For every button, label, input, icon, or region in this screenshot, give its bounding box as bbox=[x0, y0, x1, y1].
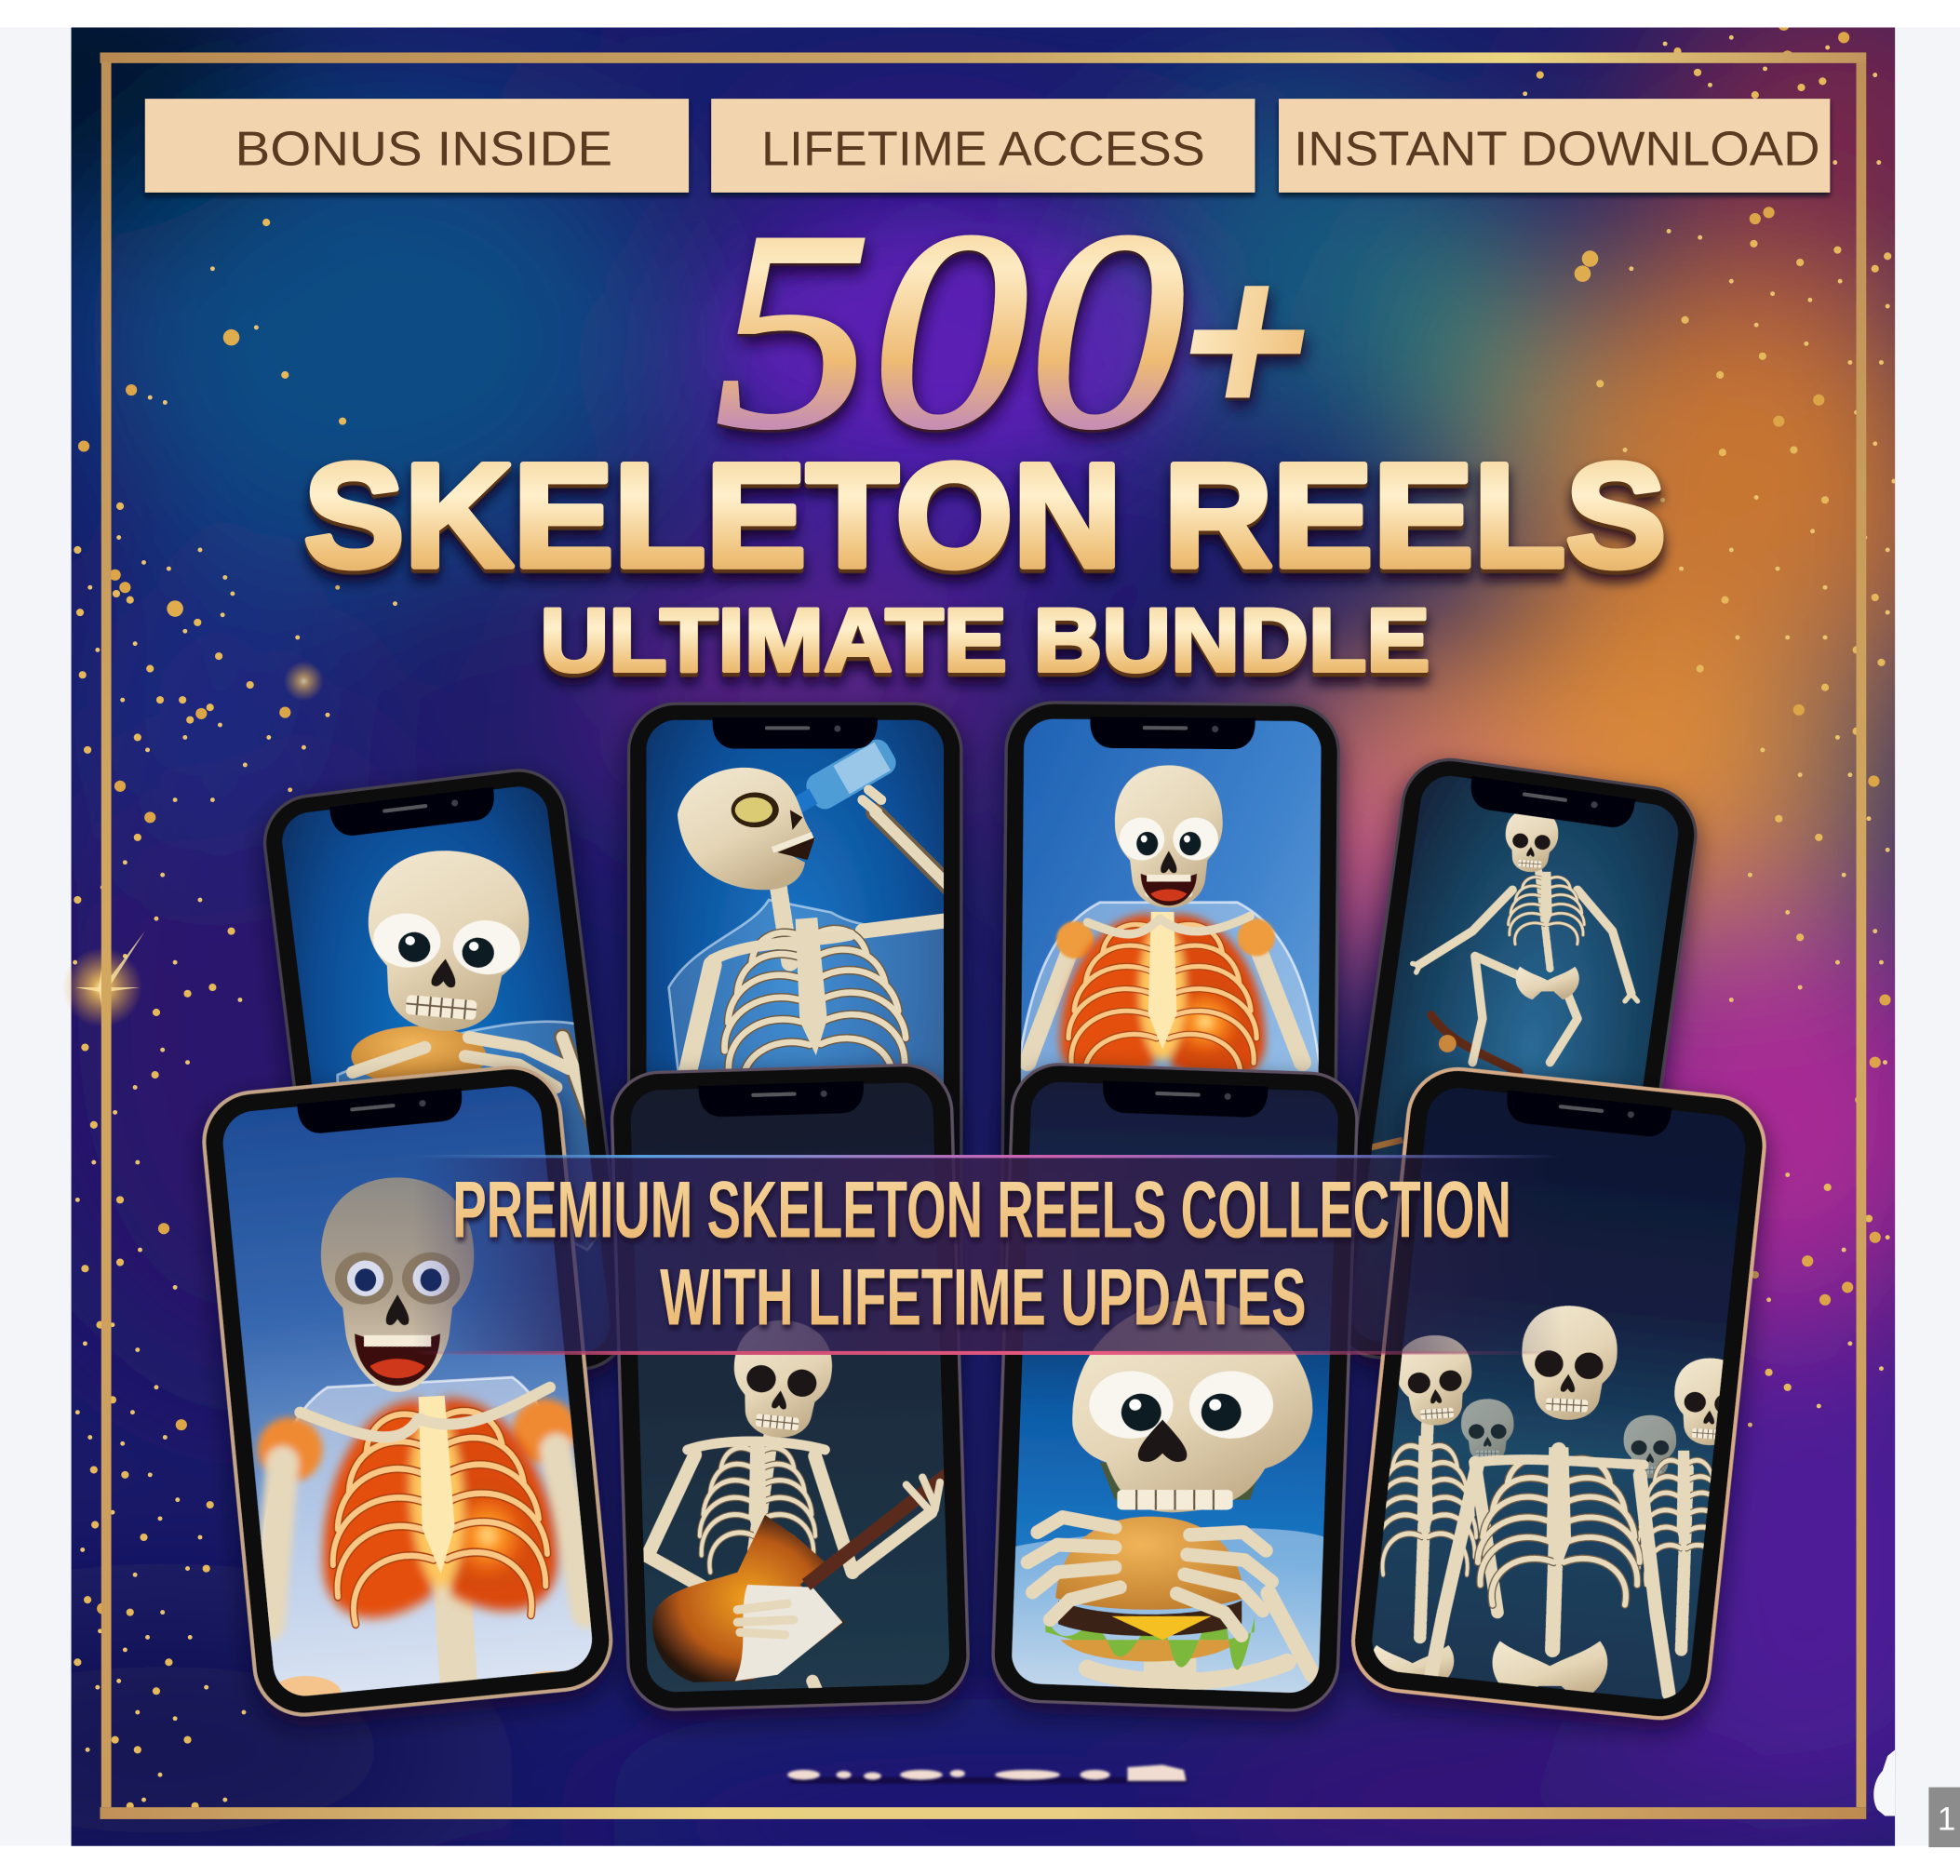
headline glow bbox=[725, 231, 1200, 444]
headline: ultimate bundle: ULTIMATE BUNDLE bbox=[540, 590, 1430, 690]
blurred smudged footer remnant bbox=[787, 1764, 1188, 1784]
phone: group of skeletons, front row bbox=[1330, 1063, 1812, 1740]
badge: bonus inside bbox=[145, 99, 689, 193]
badge: lifetime access: LIFETIME ACCESS bbox=[761, 122, 1205, 176]
phone: glowing ribcage, back row bbox=[1000, 703, 1339, 1360]
headline: 500+: 500 bbox=[715, 174, 1185, 487]
badge: lifetime access bbox=[711, 99, 1255, 193]
badge: bonus inside: BONUS INSIDE bbox=[235, 122, 612, 176]
white erased patch bottom right bbox=[1873, 1749, 1895, 1816]
phone: skeleton on skateboard, back row bbox=[1349, 751, 1712, 1381]
phone: large glowing ribcage, front row bbox=[197, 1060, 650, 1757]
headline: 500+ bbox=[715, 174, 1334, 487]
caption line two: WITH LIFETIME UPDATES bbox=[660, 1253, 1307, 1343]
phone: skeleton drinking water, back row bbox=[629, 704, 962, 1359]
headline: skeleton reels: SKELETON REELS bbox=[303, 433, 1666, 597]
translucent caption band bbox=[412, 1155, 1563, 1355]
soft glow sparkle bbox=[284, 662, 324, 701]
phone: cartoon skeleton eating burger, front row bbox=[986, 1063, 1359, 1724]
phone: skeleton playing guitar, front row bbox=[611, 1064, 970, 1735]
page number tag bbox=[1928, 1788, 1960, 1847]
phone: skeleton with burger, back row bbox=[251, 765, 618, 1390]
page number tag: 1 bbox=[1938, 1801, 1955, 1837]
headline: 500+: + bbox=[1161, 217, 1334, 462]
lens flare sparkle left bbox=[62, 931, 145, 1027]
badge: instant download: INSTANT DOWNLOAD bbox=[1294, 122, 1820, 176]
badge: instant download bbox=[1279, 99, 1830, 193]
